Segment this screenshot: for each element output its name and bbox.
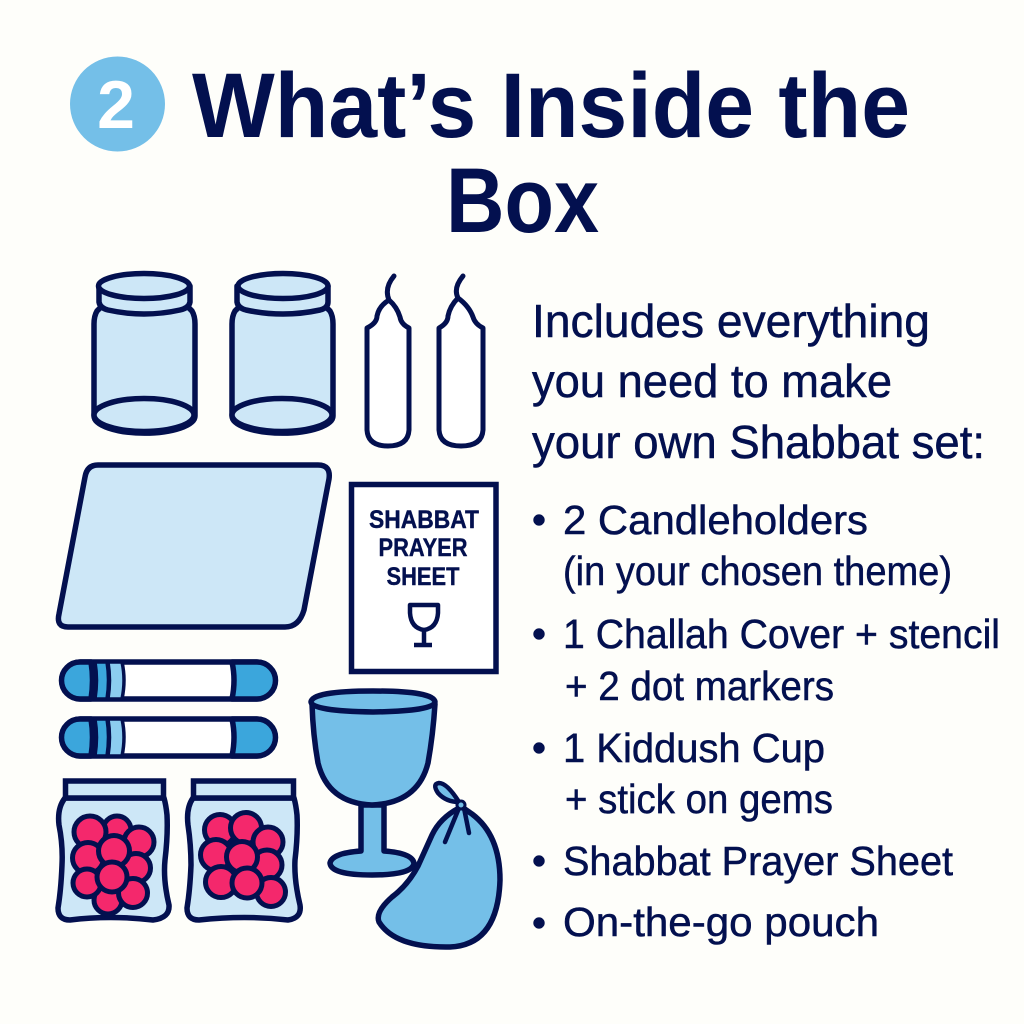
intro text <box>532 295 985 468</box>
gems <box>200 812 286 906</box>
intro text: Includes everything <box>532 295 930 347</box>
intro text: you need to make <box>532 355 892 407</box>
bullet: pouch: On-the-go pouch <box>563 899 879 945</box>
bullet: challah cover <box>534 611 1000 709</box>
icon: dot marker 1 <box>62 662 276 699</box>
card text <box>369 506 479 591</box>
bullet: challah cover: + 2 dot markers <box>565 663 834 709</box>
icon: challah cover <box>58 465 329 627</box>
card text: PRAYER <box>378 534 468 562</box>
gems <box>72 816 154 914</box>
card text: SHEET <box>386 563 460 591</box>
bullet: prayer sheet: Shabbat Prayer Sheet <box>563 838 954 884</box>
icon: candle 2 <box>439 276 483 446</box>
bullet: kiddush cup: + stick on gems <box>565 776 833 822</box>
icon: on-the-go pouch <box>378 783 500 947</box>
card text: SHABBAT <box>369 506 479 534</box>
icon: candle 1 <box>367 276 409 446</box>
icon: dot marker 2 <box>62 719 276 756</box>
icon: gem bag 1 <box>58 781 169 920</box>
bullet list <box>534 497 1000 945</box>
prayer sheet card <box>352 484 496 672</box>
bullet: kiddush cup: 1 Kiddush Cup <box>563 725 825 771</box>
icons: kit contents <box>58 274 500 947</box>
icon: candleholder jar 2 <box>232 274 333 433</box>
intro text: your own Shabbat set: <box>532 416 985 468</box>
step number badge: 2 <box>97 67 135 143</box>
icon: candleholder jar 1 <box>94 274 195 433</box>
icon: small cup <box>410 605 438 645</box>
step number badge <box>70 56 165 152</box>
bullet: kiddush cup <box>534 725 833 822</box>
title <box>192 55 910 252</box>
bullet: challah cover: 1 Challah Cover + stencil <box>563 611 1000 657</box>
title: What’s Inside the <box>192 55 910 157</box>
icon: kiddush cup <box>311 691 435 875</box>
bullet: candleholders: 2 Candleholders <box>563 497 868 543</box>
bullet: candleholders: (in your chosen theme) <box>563 548 952 594</box>
bullet: candleholders <box>534 497 952 594</box>
title: Box <box>446 150 599 252</box>
icon: gem bag 2 <box>187 781 300 920</box>
